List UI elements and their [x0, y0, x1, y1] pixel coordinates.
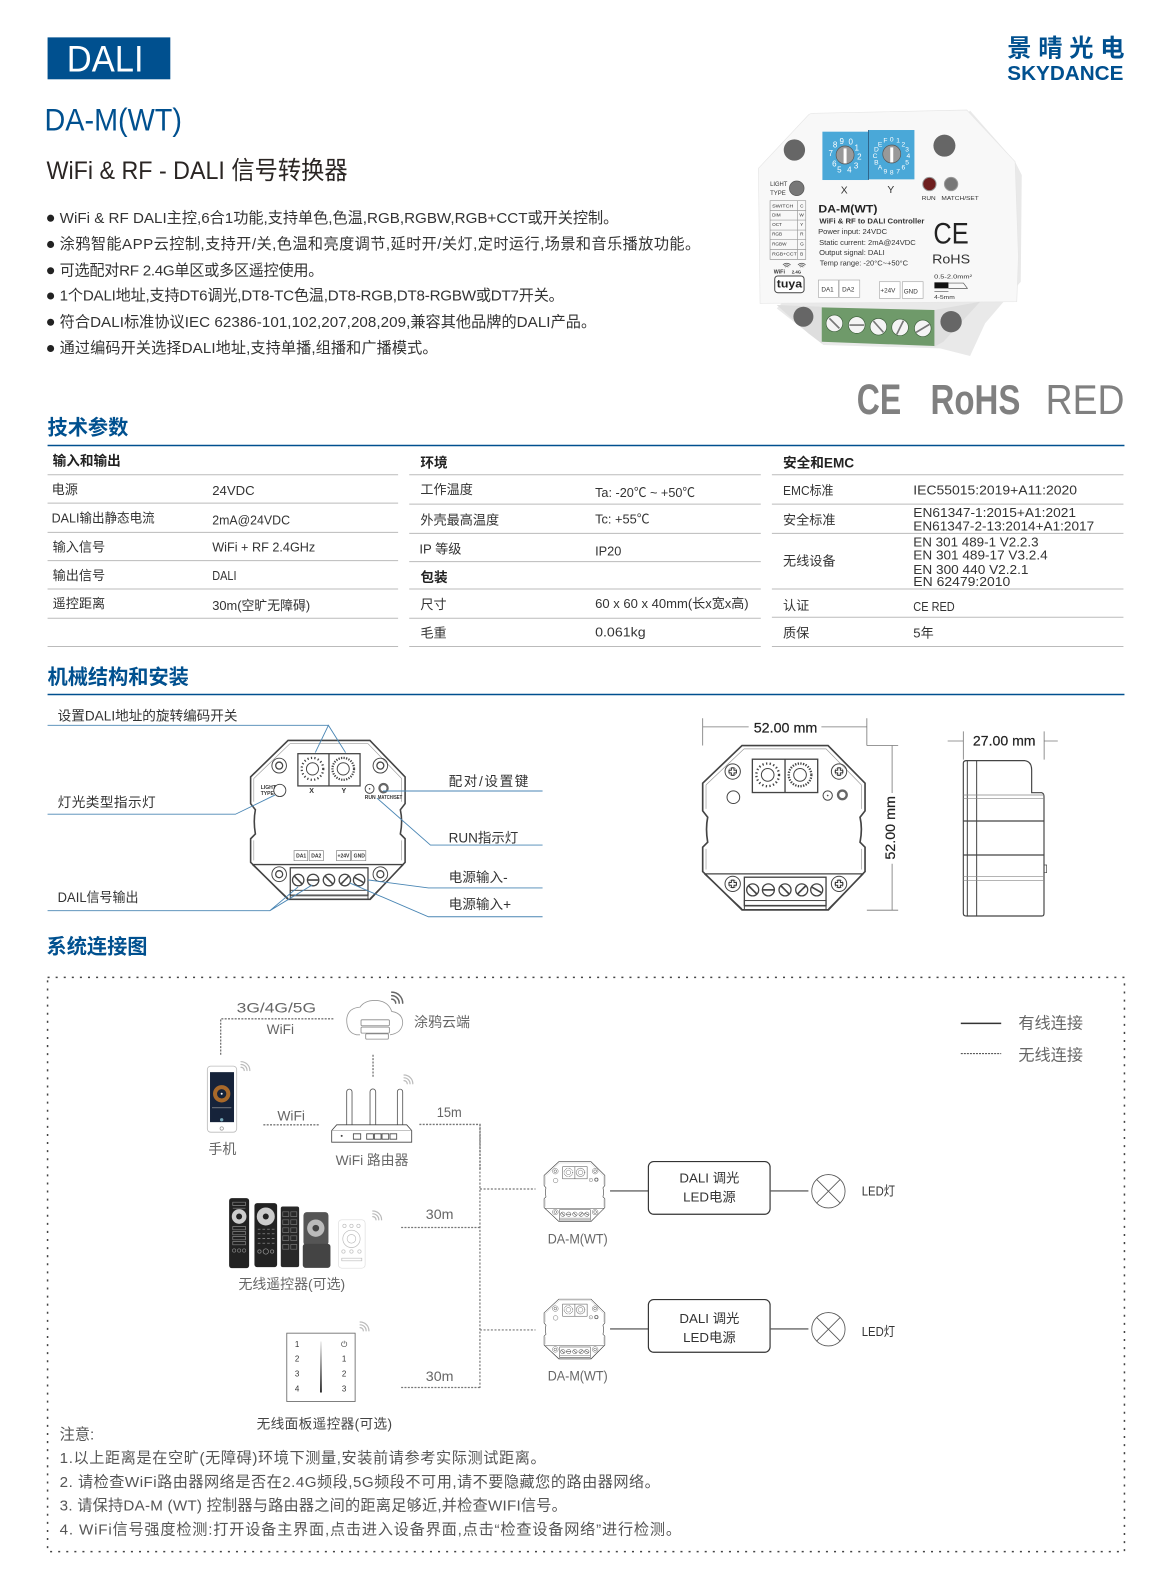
icon: wireless remotes — [229, 1198, 382, 1268]
feature list: 符合DALI标准协议IEC 62386-101,102,207,208,209,兼容其他品牌的DALI产品。 — [60, 314, 596, 331]
dimension drawing: front: 52.00 mm — [754, 719, 817, 735]
icon: cloud — [347, 992, 403, 1039]
column: safety and EMC: EN 301 489-1 V2.2.3 — [913, 535, 1039, 550]
dimension drawing: front: 52.00 mm — [882, 796, 898, 860]
rotary switches: 7 — [896, 168, 900, 175]
rotary switches: 8 — [890, 170, 894, 177]
column: input and output: 输入信号 — [53, 540, 105, 555]
column: safety and EMC — [783, 455, 1094, 640]
callout: DALI output: DAIL信号输出 — [58, 890, 138, 905]
column: input and output: 输入和输出 — [53, 453, 121, 469]
rotary switches: 3 — [854, 161, 859, 170]
certification marks: CE — [857, 376, 901, 423]
label: router: WiFi 路由器 — [336, 1152, 408, 1168]
rotary switches: 9 — [840, 137, 845, 146]
column: safety and EMC: 安全标准 — [783, 511, 835, 527]
icon: wall panel remote: 1 — [342, 1355, 347, 1364]
device small labels: RUN — [365, 795, 376, 801]
printed labels: R — [800, 232, 804, 237]
link and driver box: DALI 调光 — [679, 1171, 739, 1186]
device small labels: MATCH/SET — [378, 795, 403, 801]
icon: lamp — [812, 1313, 845, 1346]
rotary switches: D — [874, 147, 879, 154]
device small labels — [261, 785, 403, 861]
product photo — [758, 110, 1022, 356]
rotary switches: 4 — [907, 153, 911, 160]
icon: wall panel remote: ⏻ — [341, 1340, 348, 1349]
legend: 有线连接 — [1018, 1014, 1083, 1032]
column: safety and EMC: 质保 — [783, 625, 809, 640]
printed labels: RUN — [922, 196, 936, 202]
column: environment and package: 尺寸 — [420, 597, 447, 612]
certification marks — [857, 376, 1124, 423]
brand badge: DALI — [48, 37, 170, 80]
printed labels: G — [800, 241, 804, 246]
rotary switches: 2 — [857, 152, 862, 161]
rotary switches — [822, 130, 914, 180]
dimension drawing: side: 27.00 mm — [973, 733, 1036, 749]
printed labels: RGB+CCT — [772, 251, 797, 256]
printed labels: OCT — [772, 222, 782, 227]
callout: DALI output — [48, 885, 312, 911]
rotary switches: 9 — [884, 168, 888, 175]
label: wireless remotes: 无线遥控器(可选) — [238, 1276, 345, 1292]
rotary switches: 7 — [829, 149, 834, 158]
feature list: WiFi & RF DALI主控,6合1功能,支持单色,色温,RGB,RGBW,RGB+CCT或开关控制。 — [60, 210, 618, 227]
label: LED lamp: LED灯 — [862, 1184, 895, 1199]
column: safety and EMC: EN61347-1:2015+A1:2021 — [913, 505, 1076, 520]
printed labels: RGBW — [772, 241, 787, 246]
callout: power input plus — [350, 883, 543, 917]
rotary switches: E — [878, 141, 883, 148]
printed labels: 2.4G — [792, 270, 802, 275]
dimension drawing: side — [948, 731, 1058, 916]
logo: Skydance: SKYDANCE — [1007, 63, 1123, 85]
icon: phone — [207, 1062, 250, 1132]
network top section: cloud, phone, router — [207, 992, 480, 1170]
wireless bus — [480, 1124, 536, 1388]
certification marks: RoHS — [930, 377, 1020, 423]
rotary switches: 6 — [902, 165, 906, 172]
rotary switches: B — [874, 159, 879, 166]
column: environment and package: IP 等级 — [419, 541, 461, 557]
labels and links: mobile network — [221, 999, 334, 1055]
branch 2: controller to lamp — [544, 1299, 895, 1383]
printed labels: Temp range: -20°C~+50°C — [820, 260, 908, 268]
panel: system diagram frame — [48, 977, 1124, 1552]
printed labels: 0.5-2.0mm² — [934, 274, 972, 280]
link and driver box — [610, 1162, 808, 1214]
labels and links: mobile network: WiFi — [267, 1021, 294, 1037]
label: controller: DA-M(WT) — [548, 1230, 608, 1246]
icon: wall panel remote — [287, 1322, 369, 1402]
rotary switches: F — [883, 138, 887, 145]
rotary switches: 1 — [896, 138, 900, 145]
column: input and output: DALI — [212, 568, 236, 583]
callout: light type indicator — [48, 795, 275, 814]
printed labels — [770, 177, 979, 301]
device drawing — [251, 740, 405, 899]
icon: wall panel remote: 2 — [342, 1370, 347, 1379]
brand badge: DALI: DALI — [67, 38, 144, 80]
feature list: 通过编码开关选择DALI地址,支持单播,组播和广播模式。 — [60, 340, 438, 357]
rotary switches: 0 — [849, 137, 854, 146]
column: environment and package: 包装 — [420, 569, 448, 585]
icon: wall panel remote: 1 — [295, 1340, 300, 1349]
link: panel 30m: 30m — [426, 1368, 453, 1384]
link: phone to router — [263, 1107, 319, 1125]
column: safety and EMC: 无线设备 — [783, 553, 835, 569]
column: environment and package: IP20 — [595, 544, 621, 559]
logo: Skydance — [1007, 36, 1124, 85]
link: phone to router: WiFi — [277, 1107, 305, 1123]
column: input and output: 遥控距离 — [53, 595, 105, 611]
column: safety and EMC: EN61347-2-13:2014+A1:2017 — [913, 518, 1094, 533]
callout: run indicator: RUN指示灯 — [449, 831, 519, 846]
remotes and panel section — [229, 1198, 480, 1402]
column: environment and package: 60 x 60 x 40mm(长x宽x高) — [595, 595, 749, 611]
device small labels: LIGHT — [261, 785, 277, 791]
terminal labels: DA1 — [821, 287, 834, 294]
label: tuya cloud: 涂鸦云端 — [414, 1014, 470, 1030]
callout: power input minus: 电源输入- — [449, 870, 508, 885]
column: input and output — [52, 453, 315, 613]
label: phone: 手机 — [208, 1141, 236, 1157]
link and driver box: LED电源 — [683, 1330, 736, 1345]
link: remotes 30m — [401, 1206, 480, 1227]
labelled device diagram — [48, 708, 543, 917]
column: safety and EMC: EN 300 440 V2.2.1 — [913, 562, 1028, 577]
green terminal block — [822, 307, 934, 346]
notes: 1.以上距离是在空旷(无障碍)环境下测量,安装前请参考实际测试距离。 — [60, 1449, 546, 1467]
logo: Skydance: 景晴光电 — [1007, 36, 1124, 63]
rotary switches: A — [878, 165, 883, 172]
heading: mechanical: 机械结构和安装 — [48, 666, 189, 689]
link: remotes 30m: 30m — [426, 1206, 453, 1222]
column: environment and package: 外壳最高温度 — [420, 511, 499, 527]
notes: 2. 请检查WiFi路由器网络是否在2.4G频段,5G频段不可用,请不要隐藏您的路由器网络。 — [60, 1474, 660, 1491]
printed labels: TYPE — [770, 191, 786, 197]
column: environment and package: 毛重 — [420, 625, 447, 640]
column: safety and EMC: 认证 — [783, 598, 809, 613]
link: 15m: 15m — [437, 1104, 462, 1120]
printed labels: Y — [887, 185, 894, 196]
device small labels: DA1 — [296, 854, 306, 860]
column: safety and EMC: CE RED — [913, 599, 955, 614]
link and driver box — [610, 1300, 808, 1352]
callout: rotary switches — [48, 708, 346, 753]
printed labels: 4-5mm — [934, 295, 955, 301]
link and driver box: DALI 调光 — [679, 1311, 739, 1326]
column: input and output: 电源 — [52, 482, 78, 497]
column: safety and EMC: EN 301 489-17 V3.2.4 — [913, 548, 1048, 563]
printed labels: Static current: 2mA@24VDC — [819, 240, 916, 247]
device small labels: TYPE — [261, 791, 275, 797]
callout: power input minus — [368, 870, 543, 888]
printed labels: DA-M(WT) — [818, 204, 878, 216]
column: safety and EMC: 安全和EMC — [783, 455, 854, 471]
link and driver box: LED电源 — [683, 1190, 736, 1205]
icon: lamp — [812, 1175, 845, 1208]
printed labels: DIM — [772, 213, 781, 218]
printed labels: MATCH/SET — [941, 196, 979, 202]
device small labels: X — [309, 788, 314, 795]
column: safety and EMC: IEC55015:2019+A11:2020 — [913, 482, 1077, 497]
printed labels: C — [800, 204, 804, 209]
terminal labels: GND — [904, 288, 918, 295]
printed labels: W — [799, 213, 804, 218]
section rule: mechanical — [48, 694, 1124, 696]
column: safety and EMC: 5年 — [913, 625, 934, 640]
printed labels: SWITCH — [772, 204, 793, 209]
device small labels: DA2 — [311, 854, 322, 860]
terminal labels: +24V — [880, 288, 896, 295]
link: panel 30m — [401, 1368, 480, 1388]
callout: power input plus: 电源输入+ — [449, 897, 511, 912]
printed labels: CE — [933, 217, 969, 250]
column: safety and EMC: EMC标准 — [783, 483, 834, 498]
callout: light type indicator: 灯光类型指示灯 — [58, 795, 156, 810]
label: LED lamp: LED灯 — [862, 1324, 895, 1339]
column: input and output: 2mA@24VDC — [212, 512, 290, 527]
feature list: 1个DALI地址,支持DT6调光,DT8-TC色温,DT8-RGB,DT8-RGBW或DT7开关。 — [60, 288, 564, 305]
icon: wall panel remote: 4 — [295, 1385, 300, 1394]
rotary switches: 5 — [905, 159, 909, 166]
column: environment and package: 环境 — [420, 455, 448, 471]
column: input and output: DALI输出静态电流 — [52, 510, 155, 525]
printed labels: LIGHT — [770, 182, 788, 188]
rotary switches: 4 — [847, 166, 852, 175]
subtitle: WiFi & RF - DALI 信号转换器 — [47, 157, 348, 185]
printed labels: Output signal: DALI — [819, 250, 885, 257]
label: wall panel remote: 无线面板遥控器(可选) — [257, 1416, 392, 1431]
feature list — [47, 210, 700, 357]
link: 15m — [419, 1104, 480, 1170]
column: environment and package — [419, 455, 749, 640]
label: controller: DA-M(WT) — [548, 1367, 608, 1383]
icon: router — [332, 1075, 413, 1142]
rotary switches: 8 — [833, 141, 838, 150]
column: input and output: 30m(空旷无障碍) — [212, 598, 310, 613]
terminal labels — [818, 280, 923, 298]
printed labels: WiFi — [774, 270, 785, 276]
certification marks: RED — [1046, 377, 1124, 423]
screw holes — [784, 135, 962, 332]
icon: wall panel remote: 2 — [295, 1355, 300, 1364]
printed labels: WiFi & RF to DALI Controller — [819, 218, 925, 225]
heading: specs: 技术参数 — [48, 415, 128, 439]
printed labels: RoHS — [932, 251, 970, 266]
labels and links: mobile network: 3G/4G/5G — [237, 999, 316, 1015]
device small labels: +24V — [338, 854, 350, 860]
rotary switches: 1 — [855, 143, 860, 152]
legend — [961, 1014, 1083, 1065]
callout: rotary switches: 设置DALI地址的旋转编码开关 — [58, 708, 238, 723]
printed labels: RGB — [772, 232, 782, 237]
column: input and output: WiFi + RF 2.4GHz — [212, 540, 315, 555]
notes: 4. WiFi信号强度检测:打开设备主界面,点击进入设备界面,点击“检查设备网络”进行检测。 — [60, 1522, 681, 1538]
device small labels: Y — [342, 788, 347, 795]
column: environment and package: 工作温度 — [420, 482, 473, 497]
printed labels: X — [841, 186, 848, 197]
icon: wall panel remote: 3 — [295, 1370, 300, 1379]
callout: match key: 配对/设置键 — [449, 774, 529, 789]
notes — [60, 1426, 681, 1538]
rotary switches: 2 — [902, 141, 906, 148]
rotary switches: 0 — [890, 136, 894, 143]
rotary switches: 5 — [837, 166, 842, 175]
feature list: 涂鸦智能APP云控制,支持开/关,色温和亮度调节,延时开/关灯,定时运行,场景和音乐播放功能。 — [60, 235, 700, 253]
rotary switches: 3 — [905, 147, 909, 154]
printed labels: B — [800, 251, 803, 256]
icon: wall panel remote: 3 — [342, 1385, 347, 1394]
spec table — [48, 446, 1124, 647]
printed labels: Power input: 24VDC — [818, 229, 887, 236]
dimension drawing: front — [703, 718, 898, 910]
notes: 3. 请保持DA-M (WT) 控制器与路由器之间的距离足够近,并检查WIFI信号。 — [60, 1497, 567, 1514]
branch 1: controller to lamp — [544, 1162, 895, 1246]
rotary switches: 6 — [832, 160, 837, 169]
heading: system diagram: 系统连接图 — [47, 935, 148, 959]
feature list: 可选配对RF 2.4G单区或多区遥控使用。 — [60, 262, 323, 279]
column: environment and package: 0.061kg — [595, 624, 646, 639]
column: environment and package: Ta: -20℃ ~ +50℃ — [595, 485, 695, 500]
title: model name: DA-M(WT) — [45, 102, 182, 137]
legend: 无线连接 — [1018, 1047, 1083, 1065]
column: safety and EMC: EN 62479:2010 — [913, 574, 1010, 589]
notes: 注意: — [60, 1426, 94, 1444]
rotary switches: C — [873, 153, 878, 160]
printed labels: tuya — [777, 279, 802, 291]
terminal labels: DA2 — [842, 287, 855, 294]
column: environment and package: Tc: +55℃ — [595, 511, 650, 526]
column: input and output: 24VDC — [212, 483, 255, 498]
printed labels: Y — [800, 222, 803, 227]
callout: run indicator — [377, 798, 543, 846]
link: cloud to router — [371, 1055, 375, 1078]
device small labels: GND — [354, 854, 365, 860]
column: input and output: 输出信号 — [53, 568, 105, 583]
